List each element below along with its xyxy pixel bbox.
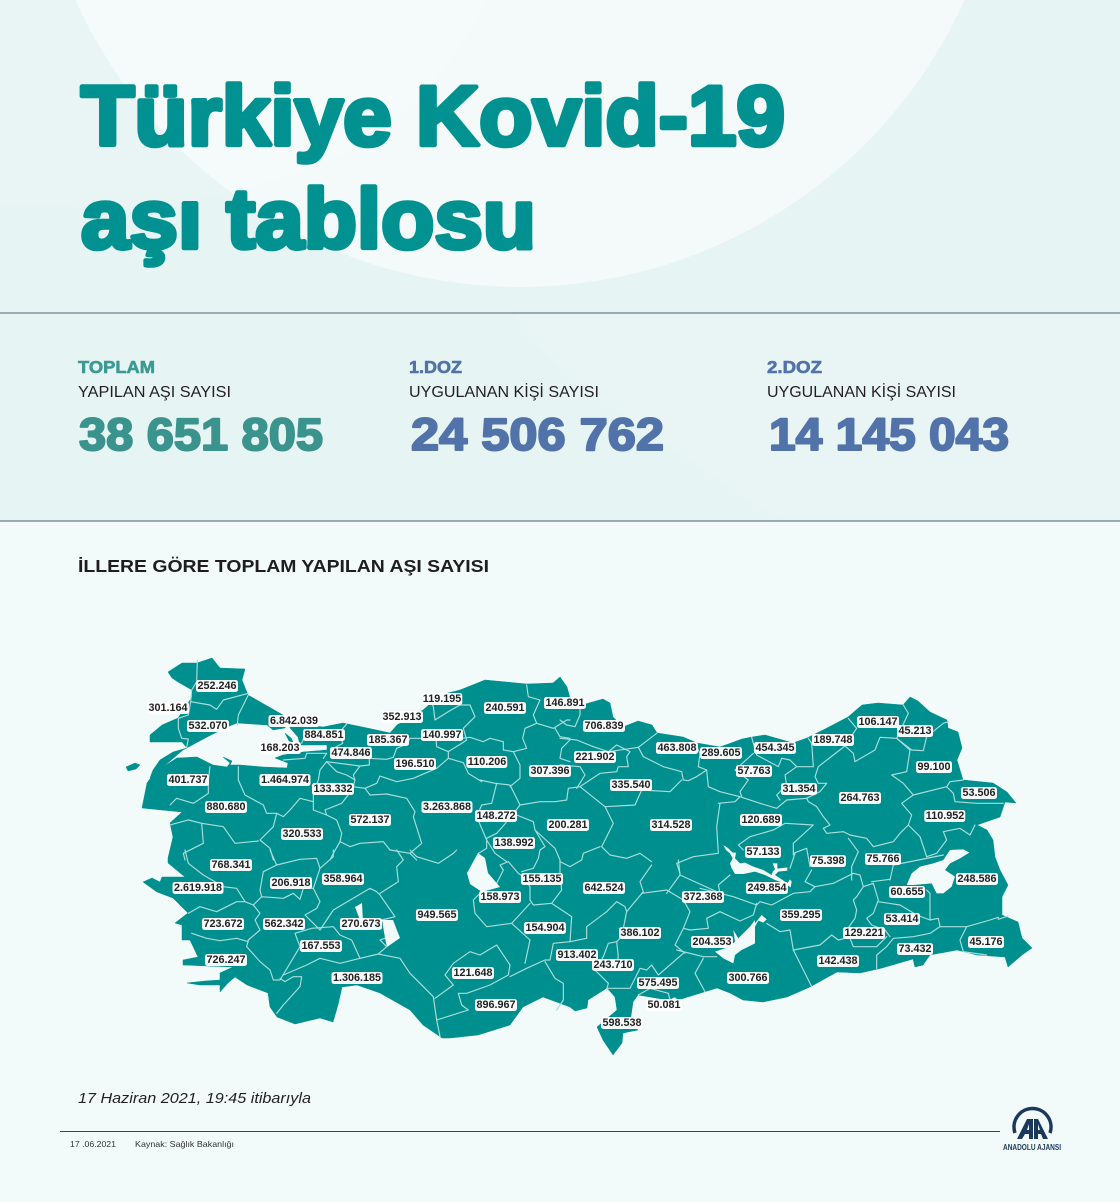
province value labels: 249.854 — [747, 882, 787, 894]
stat: toplam: 38 651 805 — [79, 409, 323, 460]
province value labels: 2.619.918 — [174, 882, 222, 894]
province value labels: 372.368 — [683, 891, 723, 903]
stat: 2. doz — [767, 357, 1009, 460]
stat: 1. doz: 24 506 762 — [411, 409, 664, 460]
province value labels: 949.565 — [417, 909, 457, 921]
province value labels: 301.164 — [148, 702, 188, 714]
stat: toplam: YAPILAN AŞI SAYISI — [78, 384, 231, 401]
province value labels: 768.341 — [211, 859, 251, 871]
province value labels: 75.398 — [811, 855, 845, 867]
title — [80, 69, 785, 268]
province value labels: 1.306.185 — [333, 972, 381, 984]
lakes — [355, 845, 969, 963]
province value labels: 474.846 — [331, 747, 371, 759]
province value labels: 642.524 — [584, 882, 624, 894]
province value labels: 148.272 — [476, 810, 516, 822]
province value labels: 270.673 — [341, 918, 381, 930]
province value labels: 60.655 — [890, 886, 924, 898]
province value labels: 140.997 — [422, 729, 462, 741]
icon: Anadolu Ajansi logo — [1003, 1109, 1061, 1152]
stat: toplam — [78, 357, 323, 460]
province value labels: 133.332 — [313, 783, 353, 795]
stat: 1. doz: 1.DOZ — [409, 357, 462, 377]
province value labels: 289.605 — [701, 747, 741, 759]
map heading: İLLERE GÖRE TOPLAM YAPILAN AŞI SAYISI — [78, 556, 489, 576]
province value labels: 352.913 — [382, 711, 422, 723]
province value labels: 75.766 — [866, 853, 900, 865]
province value labels: 1.464.974 — [261, 774, 309, 786]
province value labels: 189.748 — [813, 734, 853, 746]
province value labels: 154.904 — [525, 922, 565, 934]
province value labels: 106.147 — [858, 716, 898, 728]
province value labels: 307.396 — [530, 765, 570, 777]
province value labels: 121.648 — [453, 967, 493, 979]
stat: 1. doz — [409, 357, 664, 460]
province value labels: 240.591 — [485, 702, 525, 714]
province value labels: 401.737 — [168, 774, 208, 786]
province value labels: 532.070 — [188, 720, 228, 732]
province value labels: 138.992 — [494, 837, 534, 849]
province value labels: 6.842.039 — [270, 715, 318, 727]
province value labels: 45.176 — [969, 936, 1003, 948]
province value labels: 300.766 — [728, 972, 768, 984]
province value labels: 168.203 — [260, 742, 300, 754]
borders south-east coast — [607, 860, 845, 1000]
borders west-south — [185, 850, 512, 1037]
province value labels: 896.967 — [476, 999, 516, 1011]
stats row — [78, 357, 1009, 460]
province value labels: 119.195 — [423, 693, 461, 705]
province value labels: 3.263.868 — [423, 801, 471, 813]
province value labels: 185.367 — [368, 734, 408, 746]
province value labels: 706.839 — [584, 720, 624, 732]
province value labels: 913.402 — [557, 949, 597, 961]
province value labels: 243.710 — [593, 959, 633, 971]
province value labels: 359.295 — [781, 909, 821, 921]
title: Türkiye Kovid-19 — [81, 69, 785, 163]
province value labels: 155.135 — [522, 873, 562, 885]
province value labels: 204.353 — [692, 936, 732, 948]
province value labels: 99.100 — [917, 761, 951, 773]
province value labels: 53.414 — [885, 913, 919, 925]
stat: 2. doz: 14 145 043 — [769, 409, 1009, 460]
province value labels: 572.137 — [350, 814, 390, 826]
province value labels: 221.902 — [575, 751, 615, 763]
province value labels: 884.851 — [304, 729, 344, 741]
borders east-south — [700, 853, 1008, 968]
province value labels: 57.133 — [746, 846, 780, 858]
stat: 2. doz: UYGULANAN KİŞİ SAYISI — [767, 382, 956, 401]
stat: toplam: TOPLAM — [78, 357, 155, 377]
province value labels: 335.540 — [611, 779, 651, 791]
province value labels: 53.506 — [962, 787, 996, 799]
province value labels: 454.345 — [755, 742, 795, 754]
province value labels: 129.221 — [844, 927, 884, 939]
province value labels: 598.538 — [602, 1017, 642, 1029]
province value labels: 463.808 — [657, 742, 697, 754]
province value labels: 146.891 — [545, 697, 585, 709]
footer date: 17 .06.2021 — [70, 1140, 117, 1149]
icon: Anadolu Ajansi logo: ANADOLU AJANSI — [1003, 1142, 1061, 1152]
province value labels: 31.354 — [782, 783, 816, 795]
date note: 17 Haziran 2021, 19:45 itibarıyla — [78, 1090, 311, 1107]
province value labels: 248.586 — [957, 873, 997, 885]
province value labels: 73.432 — [898, 943, 932, 955]
province value labels: 358.964 — [323, 873, 363, 885]
province value labels: 575.495 — [638, 977, 678, 989]
source: Kaynak: Sağlık Bakanlığı — [135, 1139, 234, 1149]
borders east-north — [560, 703, 1003, 880]
province value labels: 110.952 — [926, 810, 964, 822]
province value labels: 320.533 — [282, 828, 322, 840]
province value labels: 110.206 — [468, 756, 506, 768]
province value labels: 200.281 — [548, 819, 588, 831]
province value labels: 314.528 — [651, 819, 691, 831]
province value labels: 726.247 — [206, 954, 246, 966]
province value labels: 142.438 — [818, 955, 858, 967]
province value labels: 252.246 — [197, 680, 237, 692]
province value labels: 45.213 — [898, 725, 932, 737]
province value labels: 120.689 — [741, 814, 781, 826]
province value labels: 562.342 — [264, 918, 304, 930]
borders central — [480, 780, 652, 1010]
stat: 1. doz: UYGULANAN KİŞİ SAYISI — [409, 382, 599, 401]
province value labels: 264.763 — [840, 792, 880, 804]
stat: 2. doz: 2.DOZ — [767, 357, 822, 377]
province value labels: 57.763 — [737, 765, 771, 777]
province value labels: 386.102 — [620, 927, 660, 939]
province value labels: 167.553 — [301, 940, 341, 952]
province value labels: 880.680 — [206, 801, 246, 813]
province value labels: 50.081 — [647, 999, 681, 1011]
province value labels: 196.510 — [395, 758, 435, 770]
title: aşı tablosu — [81, 172, 536, 266]
province value labels: 206.918 — [271, 877, 311, 889]
province value labels: 158.973 — [480, 891, 520, 903]
borders west-north — [170, 660, 570, 860]
province value labels: 723.672 — [203, 918, 243, 930]
